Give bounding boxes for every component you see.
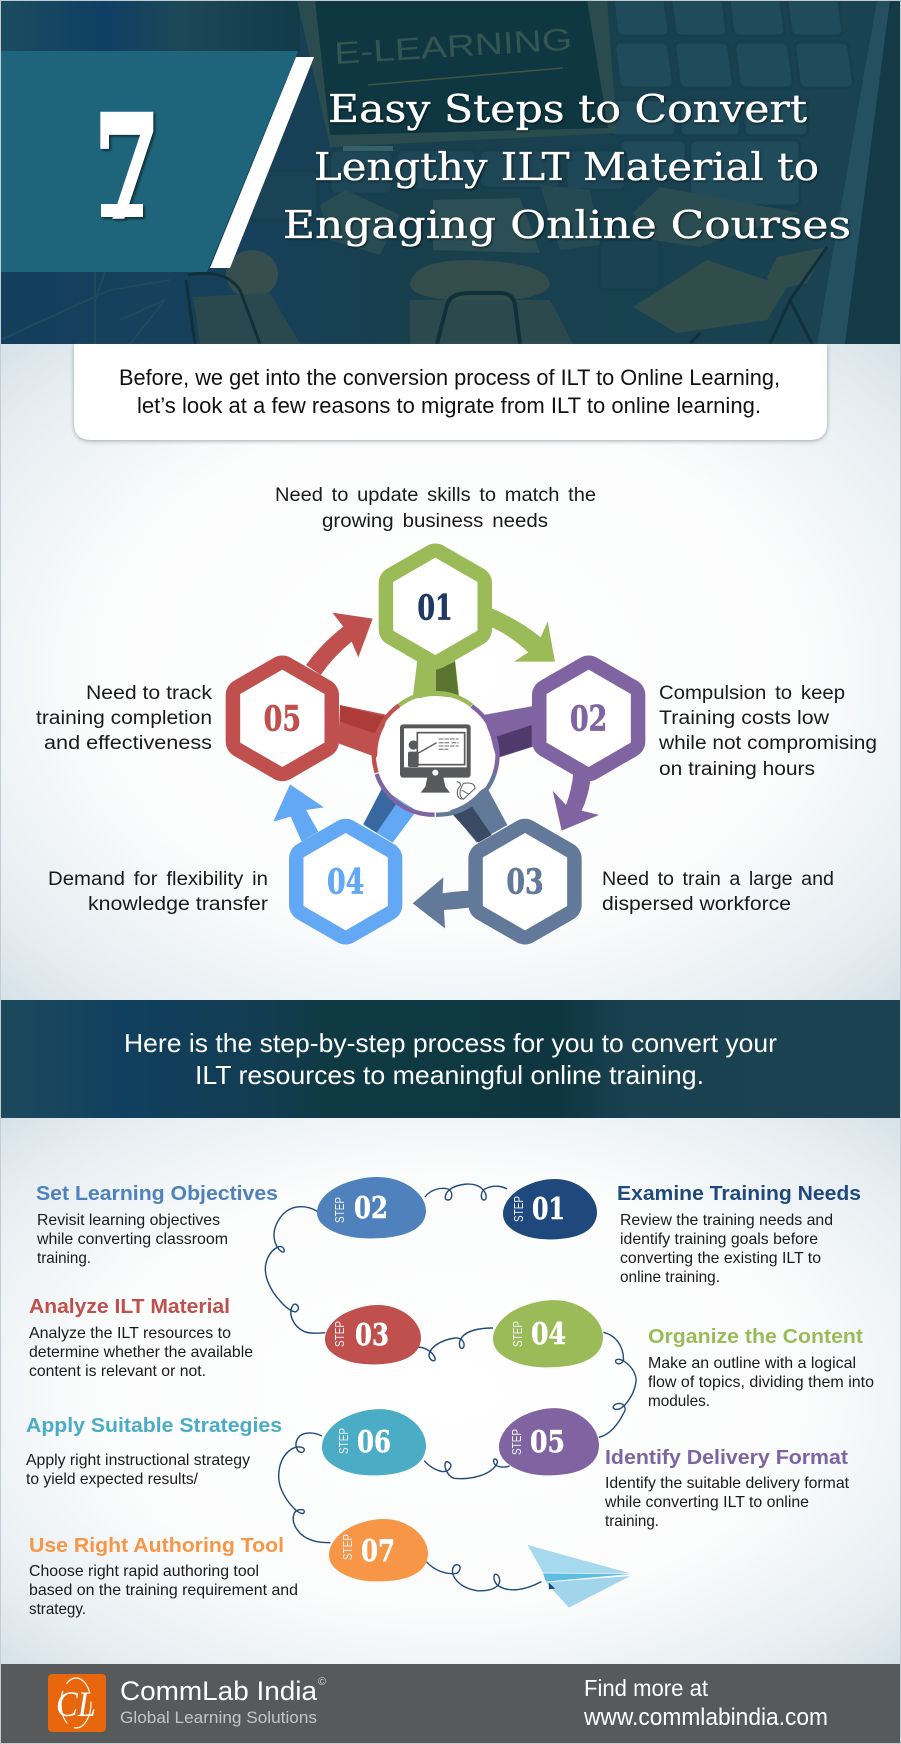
step 02 text: while converting classroom xyxy=(36,1231,228,1248)
arrow 04 to 05 xyxy=(273,784,324,842)
reason 02 text: on training hours xyxy=(659,759,815,780)
icon: monitor with presenter xyxy=(400,724,475,799)
company name: CommLab India xyxy=(120,1676,318,1706)
E-LEARNING chalk text: E-LEARNING xyxy=(333,22,573,71)
step 06: STEP xyxy=(337,1428,351,1454)
arrow 03 to 04 xyxy=(413,877,469,928)
step 04 text: Make an outline with a logical xyxy=(648,1355,856,1372)
step 06 text: Apply Suitable Strategies xyxy=(26,1414,282,1437)
chairs xyxy=(0,247,827,344)
step 03 text: content is relevant or not. xyxy=(29,1363,206,1380)
step 01 text: identify training goals before xyxy=(620,1231,818,1248)
step 07 text: based on the training requirement and xyxy=(29,1582,298,1599)
step 01: 01 xyxy=(532,1192,565,1227)
website xyxy=(583,1675,828,1731)
step 02 text: Set Learning Objectives xyxy=(36,1182,278,1205)
hexagon 04 xyxy=(303,833,388,930)
reason 03 text: dispersed workforce xyxy=(602,894,791,915)
step 07 xyxy=(329,1519,428,1581)
logo xyxy=(48,1674,106,1732)
section background: reasons xyxy=(0,344,901,1000)
hexagon 02 xyxy=(546,670,631,767)
step 02 text: Revisit learning objectives xyxy=(37,1212,220,1229)
step 03 xyxy=(325,1305,421,1364)
step 02 text xyxy=(36,1182,278,1267)
step 04: STEP xyxy=(511,1321,525,1347)
big number 7: 7 xyxy=(94,85,160,251)
step 01 text: converting the existing ILT to xyxy=(620,1250,821,1267)
section background: steps xyxy=(0,1118,901,1664)
step 03: STEP xyxy=(333,1321,347,1347)
step 06 text: Apply right instructional strategy xyxy=(26,1452,250,1469)
hexagon 02: 02 xyxy=(570,700,607,740)
arrow 02 to 03 xyxy=(553,773,599,831)
hexagon 05: 05 xyxy=(264,700,301,740)
step 03 text: Analyze ILT Material xyxy=(29,1295,230,1318)
title: Lengthy ILT Material to xyxy=(314,145,819,190)
reason 04 text: Demand for flexibility in xyxy=(48,869,268,890)
step 02: 02 xyxy=(354,1191,388,1226)
reason 01 text: Need to update skills to match the xyxy=(275,485,596,506)
step 05 text: while converting ILT to online xyxy=(604,1494,809,1511)
reason 03 text xyxy=(602,869,834,915)
step 01: STEP xyxy=(512,1196,526,1222)
step 06: 06 xyxy=(357,1425,391,1460)
spoke 05 xyxy=(338,705,387,757)
step 02 text: training. xyxy=(37,1250,91,1267)
white slash xyxy=(210,57,314,268)
hexagon 01: 01 xyxy=(417,588,453,628)
step 03: 03 xyxy=(355,1318,389,1353)
reason 04 text: knowledge transfer xyxy=(88,894,269,915)
step 06 xyxy=(322,1409,426,1475)
step 01 xyxy=(503,1179,597,1239)
step 03 text: determine whether the available xyxy=(29,1344,253,1361)
hero photo background xyxy=(0,0,901,344)
step 06 text: to yield expected results/ xyxy=(26,1471,199,1488)
arrow 05 to 01 xyxy=(306,613,373,675)
step 02 xyxy=(317,1177,426,1238)
hexagon 01 xyxy=(393,558,477,655)
reason 05 text xyxy=(36,683,213,754)
arrow 01 to 02 xyxy=(490,608,555,662)
step 05: 05 xyxy=(530,1425,565,1460)
title xyxy=(283,87,851,248)
intro text box xyxy=(74,344,827,440)
cycle diagram xyxy=(240,558,631,930)
step 05: STEP xyxy=(510,1429,524,1455)
title: Easy Steps to Convert xyxy=(328,87,808,132)
connector squiggles xyxy=(265,1184,636,1591)
icon: paper plane xyxy=(528,1545,630,1608)
process band: ILT resources to meaningful online training. xyxy=(195,1060,704,1090)
step 04: 04 xyxy=(531,1317,566,1352)
step 04 text: modules. xyxy=(648,1393,710,1410)
company name: Global Learning Solutions xyxy=(120,1708,317,1727)
intro text box: let’s look at a few reasons to migrate from ILT to online learning. xyxy=(137,393,761,418)
spoke 04 xyxy=(363,788,417,843)
step 01 text: Review the training needs and xyxy=(620,1212,833,1229)
footer xyxy=(0,1664,901,1744)
reason 01 text xyxy=(275,485,596,532)
centre circle ring xyxy=(374,693,497,815)
step 04 text: Organize the Content xyxy=(648,1325,863,1348)
step 04 text xyxy=(648,1325,874,1410)
step 07: STEP xyxy=(341,1534,355,1560)
step 05 text: Identify Delivery Format xyxy=(605,1446,848,1469)
company name xyxy=(120,1676,326,1727)
hero number panel xyxy=(0,51,298,272)
logo: CL xyxy=(56,1684,96,1724)
spoke 02 xyxy=(483,706,533,758)
hexagon 04: 04 xyxy=(327,863,364,903)
reason 01 text: growing business needs xyxy=(322,511,548,532)
step 03 text: Analyze the ILT resources to xyxy=(29,1325,231,1342)
step 07 text: strategy. xyxy=(29,1601,86,1618)
reason 02 text: while not compromising xyxy=(658,733,877,754)
reason 05 text: training completion xyxy=(36,708,212,729)
reason 05 text: Need to track xyxy=(86,683,213,704)
reason 05 text: and effectiveness xyxy=(44,733,212,754)
step 05 text: Identify the suitable delivery format xyxy=(605,1475,850,1492)
reason 03 text: Need to train a large and xyxy=(602,869,834,890)
reason 02 text: Compulsion to keep xyxy=(659,683,845,704)
step 05 xyxy=(499,1408,599,1475)
website: www.commlabindia.com xyxy=(583,1704,828,1731)
hexagon 05 xyxy=(240,670,324,767)
intro text box: Before, we get into the conversion process of ILT to Online Learning, xyxy=(119,365,780,390)
step 04 xyxy=(493,1300,603,1367)
step 05 text: training. xyxy=(605,1513,659,1530)
step 04 text: flow of topics, dividing them into xyxy=(648,1374,874,1391)
process band xyxy=(0,1000,901,1118)
process band: Here is the step-by-step process for you to convert your xyxy=(124,1028,777,1058)
step 01 text: online training. xyxy=(620,1269,720,1286)
hexagon 03 xyxy=(483,833,567,930)
step 07 text: Use Right Authoring Tool xyxy=(29,1534,284,1557)
step 03 text xyxy=(29,1295,253,1380)
company name: © xyxy=(318,1676,326,1688)
step 07 text xyxy=(29,1534,298,1618)
step 06 text xyxy=(26,1414,282,1488)
step 01 text: Examine Training Needs xyxy=(617,1182,861,1205)
step 05 text xyxy=(604,1446,850,1530)
step 07: 07 xyxy=(361,1534,395,1569)
title: Engaging Online Courses xyxy=(283,203,851,248)
reason 02 text: Training costs low xyxy=(659,708,829,729)
spoke 03 xyxy=(450,787,507,843)
reason 02 text xyxy=(658,683,877,780)
step 07 text: Choose right rapid authoring tool xyxy=(29,1563,259,1580)
website: Find more at xyxy=(584,1675,709,1701)
hexagon 03: 03 xyxy=(506,863,544,903)
spoke 01 xyxy=(413,660,459,698)
step 02: STEP xyxy=(333,1197,347,1223)
step 01 text xyxy=(617,1182,861,1286)
reason 04 text xyxy=(48,869,269,915)
big number 7 xyxy=(94,85,160,251)
